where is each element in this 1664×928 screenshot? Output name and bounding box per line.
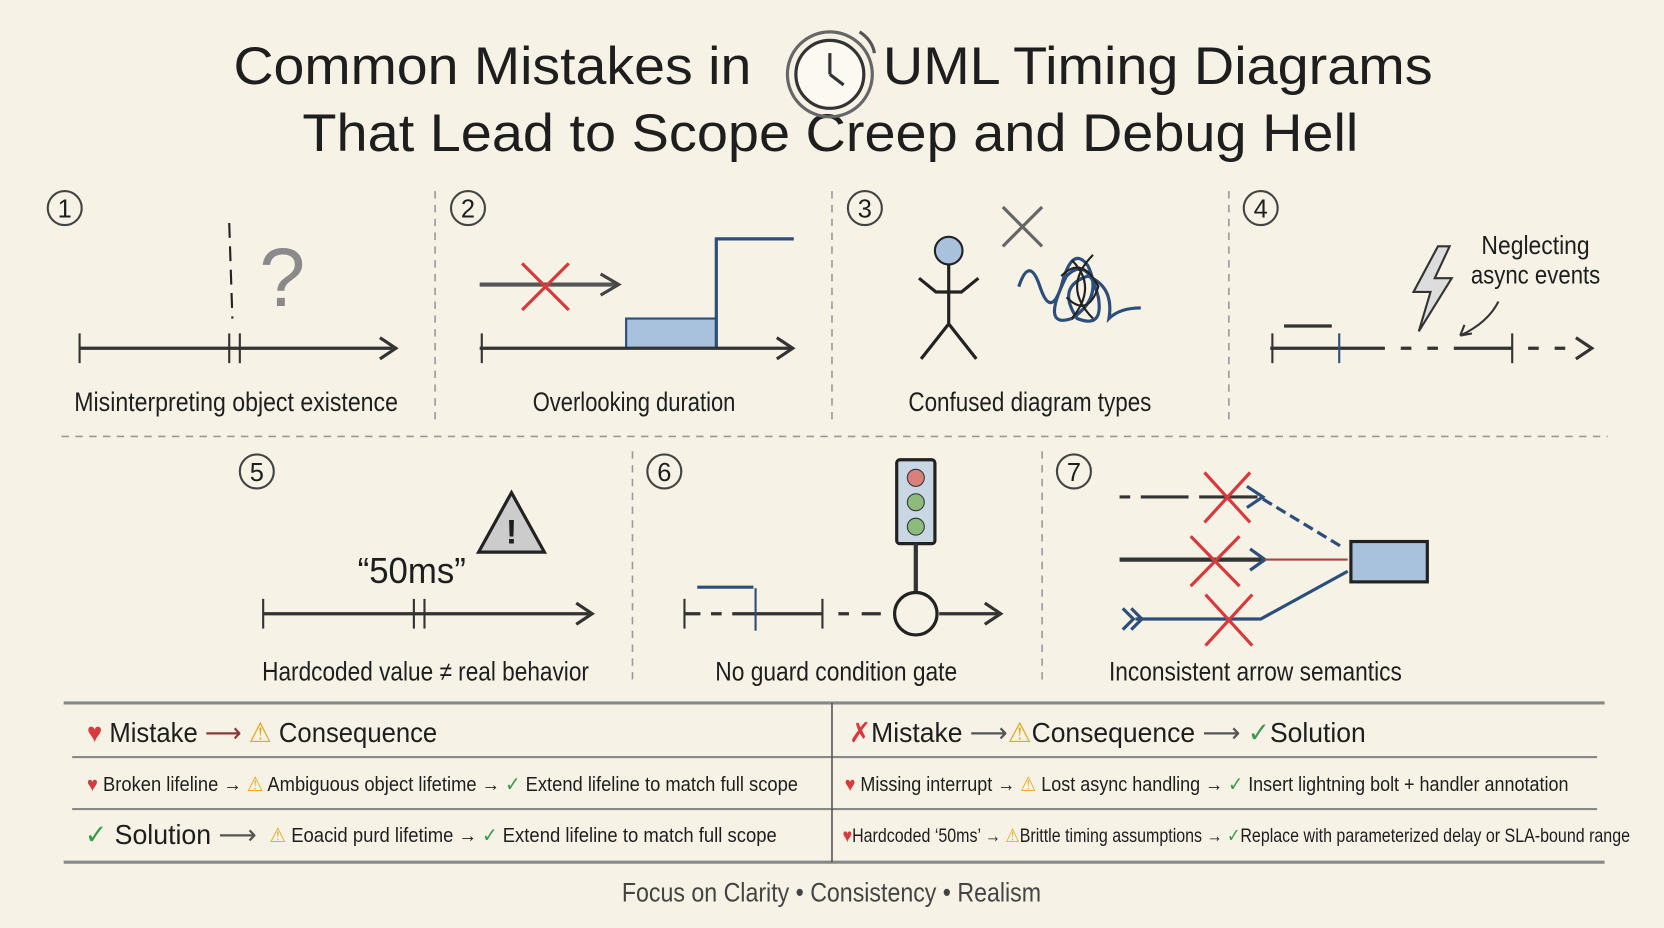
- table: [64, 703, 1630, 862]
- panel 1: object existence: [48, 191, 398, 417]
- icon: clock: [787, 32, 874, 117]
- row 1 right: ♥ Missing interrupt → ⚠ Lost async handling → ✓ Insert lightning bolt + handler annotation: [845, 774, 1568, 796]
- panel 1: object existence: 1: [58, 196, 72, 224]
- title: [233, 37, 1433, 163]
- panel 7: arrow semantics: [1057, 454, 1427, 687]
- caption 6: No guard condition gate: [715, 657, 957, 687]
- panel 3: confused diagram types: 3: [858, 196, 872, 224]
- table header right: ✗Mistake ⟶⚠Consequence ⟶ ✓Solution: [849, 717, 1366, 748]
- panel 2: duration: [451, 191, 794, 417]
- caption 3: Confused diagram types: [908, 387, 1151, 417]
- caption 1: Misinterpreting object existence: [74, 387, 398, 417]
- panel 6: guard gate: [647, 454, 1001, 687]
- table header left: ♥ Mistake ⟶ ⚠ Consequence: [87, 717, 437, 748]
- panel 5: hardcoded value: !: [506, 514, 517, 552]
- panel 3: confused diagram types: [848, 191, 1151, 417]
- panel 5: hardcoded value: [240, 454, 592, 687]
- row 1 left: ♥ Broken lifeline → ⚠ Ambiguous object lifetime → ✓ Extend lifeline to match full scope: [87, 774, 798, 796]
- panel 5: hardcoded value: “50ms”: [358, 550, 466, 591]
- panel 4: async events: async events: [1471, 261, 1600, 290]
- panel 2: duration: 2: [461, 196, 475, 224]
- panel 1: object existence: ?: [259, 231, 305, 324]
- caption 7: Inconsistent arrow semantics: [1109, 657, 1402, 687]
- title: Common Mistakes in: [233, 37, 751, 96]
- caption 2: Overlooking duration: [533, 387, 735, 417]
- table: ⚠ Eoacid purd lifetime → ✓ Extend lifeline to match full scope: [270, 825, 777, 847]
- panel 6: guard gate: 6: [657, 459, 671, 487]
- panel 4: async events: [1244, 191, 1600, 363]
- caption 5: Hardcoded value ≠ real behavior: [262, 657, 589, 687]
- dividers: [62, 191, 1608, 685]
- panel 4: async events: Neglecting: [1481, 232, 1590, 260]
- title: UML Timing Diagrams: [883, 37, 1433, 96]
- title: That Lead to Scope Creep and Debug Hell: [302, 104, 1358, 163]
- panel 4: async events: 4: [1254, 196, 1268, 224]
- panel 7: arrow semantics: 7: [1067, 459, 1081, 487]
- footer: Focus on Clarity • Consistency • Realism: [622, 877, 1041, 907]
- panel 5: hardcoded value: 5: [250, 459, 264, 487]
- row 2 left: ✓ Solution ⟶: [85, 819, 257, 850]
